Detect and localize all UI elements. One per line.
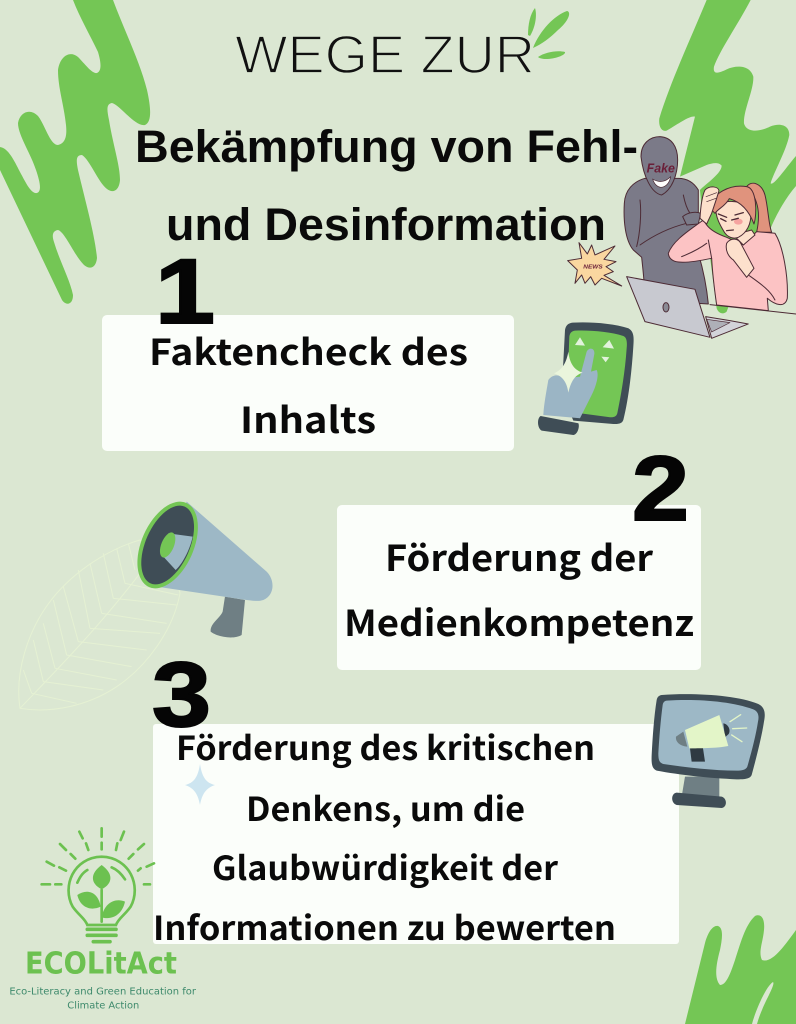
decorative green squiggle: top right (659, 0, 796, 313)
card 3 text: Informationen zu bewerten (153, 902, 616, 950)
logo tagline (9, 986, 196, 1011)
heading: Bekämpfung von Fehl- und Desinformation: Bekämpfung von Fehl- (135, 121, 638, 172)
card 3 text: Denkens, um die (246, 783, 525, 831)
icon: sparkle (185, 764, 215, 805)
number 1: 1 (155, 241, 215, 343)
news burst (568, 243, 622, 286)
laptop screen (627, 277, 710, 337)
card 1 text (149, 324, 468, 444)
card 2 text: Medienkompetenz (344, 595, 694, 647)
number 2: 2 (632, 438, 689, 540)
icon: title leaf accent (528, 8, 569, 59)
hooded figure head (641, 137, 678, 195)
illustration: fake news figure and confused woman at laptop: NEWS (583, 264, 603, 270)
card 3 text (153, 722, 616, 950)
woman's ponytail (747, 183, 772, 232)
hooded figure body (624, 178, 708, 304)
card 1 text: Faktencheck des (149, 324, 468, 376)
woman's hand on head (700, 187, 719, 224)
bulb with plant (42, 828, 154, 942)
woman's hand on chin (726, 239, 754, 277)
logo tagline: Climate Action (67, 1000, 139, 1011)
card 3 text: Glaubwürdigkeit der (212, 842, 559, 890)
heading: Bekämpfung von Fehl- und Desinformation: und Desinformation (166, 199, 606, 250)
illustration: fake news figure and confused woman at laptop (568, 137, 796, 338)
woman's face (716, 201, 751, 238)
card 2 text: Förderung der (385, 530, 653, 582)
folded hand of figure (683, 212, 701, 225)
grin (653, 177, 671, 187)
card 2 text (344, 530, 694, 647)
card 3 text: Förderung des kritischen (176, 722, 595, 770)
logo tagline: Eco-Literacy and Green Education for (9, 986, 196, 997)
icon: tablet with pointing hand (538, 322, 634, 435)
decorative green squiggle: bottom right (685, 915, 796, 1024)
icon: monitor with megaphone (652, 694, 765, 808)
icon: megaphone (125, 492, 273, 637)
Fake label on face: Fake (647, 162, 675, 176)
card 2 (337, 505, 701, 670)
card 3 (153, 724, 679, 944)
number 3: 3 (152, 644, 211, 746)
card 1 (102, 315, 514, 451)
logo wordmark: ECOLitAct (25, 946, 177, 981)
decorative green squiggle: top left (0, 0, 150, 304)
title: WEGE ZUR: WEGE ZUR (235, 25, 535, 85)
woman's fringe (710, 186, 756, 224)
card 1 text: Inhalts (240, 392, 376, 444)
laptop base (706, 317, 748, 338)
decorative pale leaf (19, 540, 180, 710)
table line (710, 305, 796, 314)
woman's neck (733, 230, 755, 245)
logo: ECOLitAct (9, 828, 196, 1011)
heading: Bekämpfung von Fehl- und Desinformation (135, 121, 638, 250)
woman's sweater (668, 220, 787, 311)
